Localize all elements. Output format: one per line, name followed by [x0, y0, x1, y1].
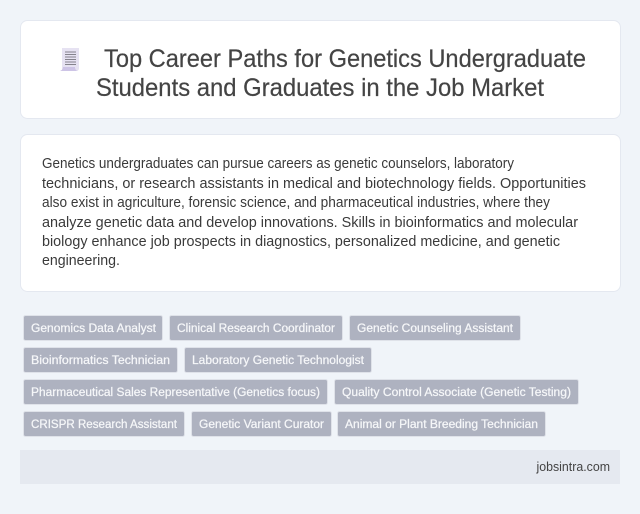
title — [96, 45, 586, 102]
tag: Animal or Plant Breeding Technician: Animal or Plant Breeding Technician — [345, 417, 538, 431]
tag: Genomics Data Analyst: Genomics Data Analyst — [31, 321, 157, 335]
tag: Laboratory Genetic Technologist — [184, 348, 372, 372]
footer source text: jobsintra.com — [536, 460, 610, 474]
tag: Animal or Plant Breeding Technician — [338, 412, 546, 436]
tag: Quality Control Associate — [334, 380, 578, 404]
tag: Pharmaceutical Sales Representative: Pharmaceutical Sales Representative (Genetics focus) — [31, 385, 320, 399]
tag: Genetic Counseling Assistant — [350, 316, 520, 340]
summary text: engineering. — [42, 253, 120, 269]
tag: Pharmaceutical Sales Representative — [24, 380, 328, 404]
tag: CRISPR Research Assistant — [24, 412, 184, 436]
tag: Clinical Research Coordinator — [170, 316, 342, 340]
summary text: technicians, or research assistants in medical and biotechnology fields. Opportunities — [42, 176, 586, 192]
panel: summary — [20, 134, 620, 292]
tag: Quality Control Associate: Quality Control Associate (Genetic Testing) — [342, 385, 571, 399]
title: Students and Graduates in the Job Market — [96, 74, 544, 102]
tag: Genetic Counseling Assistant: Genetic Counseling Assistant — [357, 321, 514, 335]
tag: Genetic Variant Curator — [192, 412, 332, 436]
summary text: also exist in agriculture, forensic science, and pharmaceutical industries, where they — [42, 195, 551, 211]
tag: Laboratory Genetic Technologist: Laboratory Genetic Technologist — [192, 353, 365, 367]
summary text — [42, 156, 586, 269]
icon: document scroll — [60, 48, 79, 71]
tag: Bioinformatics Technician — [24, 348, 178, 372]
tag: CRISPR Research Assistant: CRISPR Research Assistant — [31, 417, 178, 431]
tag: Genomics Data Analyst — [24, 316, 162, 340]
tag: Genetic Variant Curator: Genetic Variant Curator — [199, 417, 324, 431]
summary text: analyze genetic data and develop innovations. Skills in bioinformatics and molecular — [42, 215, 578, 231]
career tags — [24, 316, 578, 436]
title: Top Career Paths for Genetics Undergraduate — [104, 45, 586, 73]
footer — [20, 450, 620, 484]
summary text: biology enhance job prospects in diagnostics, personalized medicine, and genetic — [42, 234, 560, 250]
summary text: Genetics undergraduates can pursue careers as genetic counselors, laboratory — [42, 156, 515, 172]
tag: Clinical Research Coordinator: Clinical Research Coordinator — [177, 321, 335, 335]
panel: header — [20, 20, 620, 118]
tag: Bioinformatics Technician: Bioinformatics Technician — [31, 353, 170, 367]
